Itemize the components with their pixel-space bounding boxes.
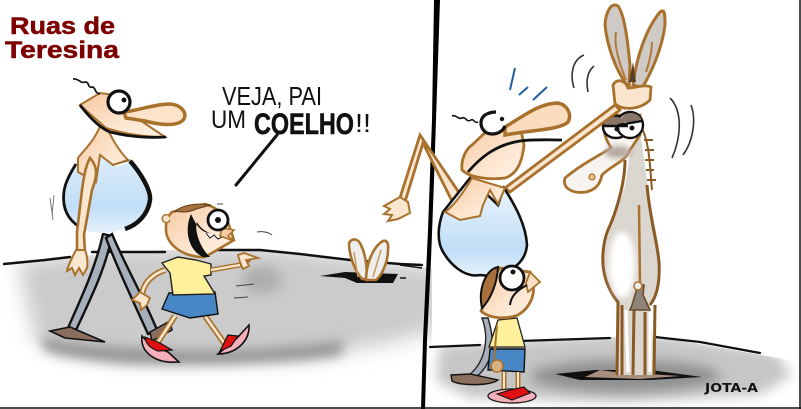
back arm bbox=[142, 270, 165, 295]
shirt bbox=[162, 257, 215, 295]
hand bbox=[67, 250, 87, 275]
shorts bbox=[162, 292, 218, 318]
white chest highlight bbox=[609, 232, 635, 298]
raised right arm bbox=[505, 105, 620, 192]
right panel ground shadow bbox=[436, 335, 792, 402]
speech text bbox=[211, 81, 371, 141]
legs bbox=[622, 305, 655, 375]
nose bbox=[220, 228, 234, 241]
speech text: UM bbox=[211, 106, 246, 134]
speech text: COELHO bbox=[254, 108, 354, 141]
motion lines blue bbox=[510, 68, 547, 100]
hair bbox=[452, 116, 478, 122]
nose bbox=[526, 272, 540, 292]
tank top bbox=[64, 128, 148, 233]
eye bbox=[208, 210, 228, 230]
speech tail bbox=[236, 135, 277, 185]
head bbox=[564, 115, 640, 192]
title bbox=[5, 13, 120, 64]
shoulder and neck bbox=[78, 126, 128, 182]
hand on ears bbox=[613, 81, 651, 108]
legs behind boy bbox=[465, 318, 492, 380]
hole under donkey bbox=[555, 370, 702, 380]
donkey bbox=[564, 5, 665, 375]
hair bbox=[73, 79, 100, 94]
motion lines bbox=[50, 195, 54, 220]
mouth bbox=[468, 140, 562, 172]
head shading bbox=[604, 146, 632, 158]
nose bbox=[505, 103, 570, 135]
nose bbox=[124, 104, 185, 124]
ear bbox=[162, 215, 170, 223]
hair bbox=[175, 204, 211, 212]
panel divider bbox=[421, 0, 440, 409]
boy walking bbox=[132, 204, 272, 362]
shoes bbox=[142, 336, 179, 362]
shoulder bbox=[445, 178, 505, 220]
left ear bbox=[605, 5, 630, 88]
shoe bbox=[451, 374, 498, 385]
left arm bbox=[398, 135, 462, 205]
head bbox=[481, 268, 533, 318]
right ear bbox=[633, 11, 665, 88]
left ground line bbox=[4, 250, 422, 265]
pointing arm bbox=[211, 259, 250, 270]
shirt bbox=[489, 318, 525, 347]
eye bbox=[481, 112, 505, 134]
head bbox=[166, 204, 234, 257]
eye bbox=[500, 266, 524, 290]
legs bbox=[68, 234, 112, 330]
hair bbox=[481, 267, 498, 308]
mane bbox=[640, 125, 656, 190]
rabbit ears in hole bbox=[320, 239, 398, 283]
motion lines bbox=[217, 204, 272, 298]
donkey motion lines bbox=[572, 55, 694, 158]
title: Ruas de bbox=[10, 13, 115, 40]
tank top bbox=[439, 178, 527, 276]
body and neck bbox=[603, 130, 660, 375]
legs bbox=[504, 372, 518, 390]
signature: JOTA-A bbox=[704, 381, 759, 395]
eye bbox=[108, 91, 130, 113]
speech text: VEJA, PAI bbox=[222, 81, 322, 111]
father lifting donkey ears bbox=[384, 68, 651, 385]
left panel ground shadow bbox=[18, 246, 440, 364]
right ground line bbox=[430, 337, 760, 353]
head bbox=[80, 93, 165, 137]
arm line bbox=[494, 325, 497, 360]
mouth bbox=[510, 285, 527, 305]
mouth bbox=[188, 214, 212, 257]
legs bbox=[158, 316, 227, 347]
hand bbox=[491, 360, 503, 372]
arm bbox=[77, 158, 96, 252]
shoes bbox=[488, 389, 536, 403]
eyes bbox=[603, 116, 629, 138]
head bbox=[462, 125, 524, 179]
speech text: !! bbox=[355, 108, 371, 138]
tail and belly bbox=[630, 285, 650, 310]
title: Teresina bbox=[5, 37, 120, 64]
shorts bbox=[488, 349, 525, 372]
boy looking up bbox=[481, 266, 540, 403]
ear centres bbox=[615, 32, 652, 80]
father walking bbox=[50, 79, 185, 342]
shoes bbox=[50, 327, 105, 342]
teeth bbox=[206, 233, 222, 239]
